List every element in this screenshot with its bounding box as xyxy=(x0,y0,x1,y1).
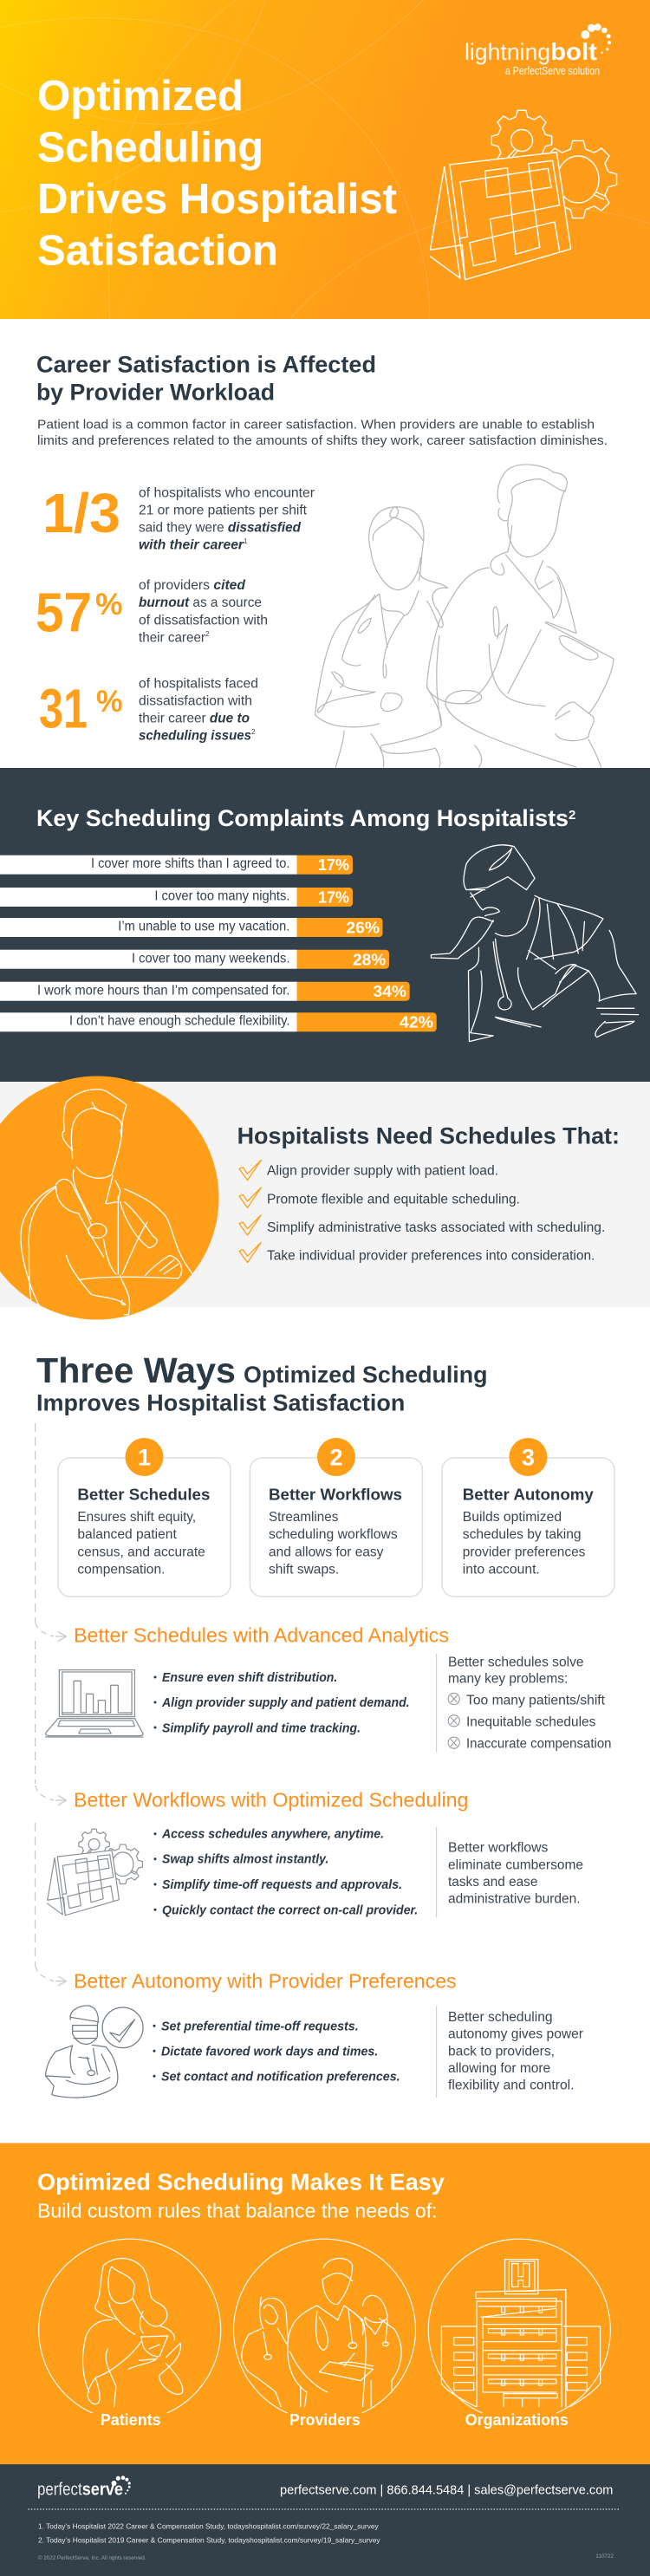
icon: patients circle xyxy=(39,2239,221,2413)
stat: 57 percent: % xyxy=(95,588,123,621)
checklist: Take individual provider preferences into consideration. xyxy=(267,1249,595,1264)
card: better schedules: Ensures shift equity, xyxy=(77,1510,196,1525)
heading: career satisfaction xyxy=(36,351,376,406)
logo: lightningbolt: bolt xyxy=(550,38,597,65)
stat: 57 percent: of providers cited xyxy=(139,578,245,593)
stat: 31 percent: 2 xyxy=(251,728,256,736)
panel: optimized scheduling makes it easy xyxy=(0,2143,650,2465)
stat: one third: 21 or more patients per shift xyxy=(139,503,308,517)
connector: dashed timeline with arrows xyxy=(36,1423,66,1986)
card: better autonomy xyxy=(442,1438,614,1597)
illustration: thinking doctor line art xyxy=(431,845,639,1042)
heading: makes it easy: Optimized Scheduling Makes It Easy xyxy=(37,2169,445,2195)
logo: lightningbolt: lightning xyxy=(465,39,550,65)
card: better workflows: shift swaps. xyxy=(269,1562,339,1577)
list: workflow benefits: Simplify time-off requests and approvals. xyxy=(162,1877,402,1892)
heading: optimized scheduling: Better Workflows with Optimized Scheduling xyxy=(74,1788,468,1811)
panel: key scheduling complaints xyxy=(0,768,650,1082)
list: autonomy benefits: Dictate favored work days and times. xyxy=(161,2044,378,2059)
text: references: 2. Today’s Hospitalist 2019 Career & Compensation Study, todayshospitalist.com/survey/19_salary_survey xyxy=(38,2535,380,2544)
text block: key problems: many key problems: xyxy=(448,1671,568,1686)
panel: career satisfaction xyxy=(36,351,614,767)
stat: 31 percent xyxy=(39,676,258,744)
bar chart: complaints xyxy=(0,855,437,1031)
bar: 28 percent weekends xyxy=(0,950,389,969)
text block: intro paragraph xyxy=(37,417,608,448)
heading: three ways xyxy=(36,1350,487,1416)
heading: three ways: Improves Hospitalist Satisfaction xyxy=(36,1390,405,1416)
card: better autonomy: 3 xyxy=(522,1445,535,1471)
panel: header xyxy=(0,0,650,319)
icon: masked doctor with check xyxy=(46,2006,143,2098)
card: better autonomy: Builds optimized xyxy=(463,1510,562,1525)
illustration: two doctors line art xyxy=(315,465,614,767)
bar: 28 percent weekends: 28% xyxy=(353,951,386,968)
icon: small calendar with gears xyxy=(48,1829,142,1916)
text block: intro paragraph: limits and preferences related to the amounts of shifts they work, career satisfaction diminishes. xyxy=(37,433,608,448)
heading: three ways: Three Ways xyxy=(36,1350,236,1390)
stat: 57 percent: of dissatisfaction with xyxy=(139,613,268,628)
stat: one third: 1 xyxy=(244,537,248,545)
icon: providers circle xyxy=(233,2239,416,2413)
card: better schedules: 1 xyxy=(138,1445,151,1471)
text block: key problems: Too many patients/shift xyxy=(466,1693,606,1708)
text block: autonomy summary: allowing for more xyxy=(448,2061,550,2076)
title: Optimized xyxy=(37,73,244,120)
stat: 31 percent: dissatisfaction with xyxy=(139,693,252,708)
icon: orange circle with doctor xyxy=(0,1077,218,1319)
checklist: Align provider supply with patient load. xyxy=(267,1164,498,1179)
text: references: 1. Today’s Hospitalist 2022 Career & Compensation Study, todayshospitalist.com/survey/22_salary_survey xyxy=(38,2521,379,2530)
text: copyright xyxy=(38,2553,614,2561)
title xyxy=(37,73,397,275)
panel: hospitalists need schedules xyxy=(0,1077,650,1319)
card: better schedules: Better Schedules xyxy=(77,1486,210,1504)
text block: key problems: Inequitable schedules xyxy=(466,1715,596,1730)
heading: provider preferences: Better Autonomy with Provider Preferences xyxy=(74,1969,457,1992)
list: analytics benefits: Ensure even shift distribution. xyxy=(162,1670,337,1685)
list: workflow benefits: Access schedules anywhere, anytime. xyxy=(161,1827,384,1842)
card: better workflows: Streamlines xyxy=(269,1510,338,1525)
text block: autonomy summary: autonomy gives power xyxy=(448,2027,583,2042)
list: analytics benefits: Align provider supply and patient demand. xyxy=(161,1695,410,1710)
bar: 26 percent vacation: I’m unable to use my vacation. xyxy=(118,920,289,934)
heading: complaints: 2 xyxy=(569,808,575,823)
icon: calendar with gears xyxy=(430,110,617,280)
title: Satisfaction xyxy=(37,228,278,275)
bar: 17 percent nights xyxy=(0,888,353,907)
text block: intro paragraph: Patient load is a common factor in career satisfaction. When providers are unable to establish xyxy=(37,417,595,432)
bar: 26 percent vacation: 26% xyxy=(346,920,380,937)
text block: autonomy summary xyxy=(448,2010,583,2092)
card: better workflows: scheduling workflows xyxy=(269,1527,398,1542)
section: better workflows with optimized scheduling xyxy=(48,1788,583,1917)
list: analytics benefits xyxy=(154,1670,410,1735)
stat: 31 percent: % xyxy=(96,685,123,719)
bar: 17 percent more shifts xyxy=(0,855,353,875)
heading: makes it easy xyxy=(37,2169,445,2221)
stat: 57 percent: 2 xyxy=(205,630,210,638)
bar: 17 percent nights: I cover too many nights. xyxy=(154,888,289,903)
heading: makes it easy: Build custom rules that balance the needs of: xyxy=(37,2199,438,2221)
text block: key problems: Inaccurate compensation xyxy=(466,1737,612,1752)
checklist: Promote flexible and equitable scheduling. xyxy=(267,1192,520,1207)
stat: one third: said they were dissatisfied xyxy=(139,521,301,536)
heading: career satisfaction: by Provider Workload xyxy=(36,380,275,406)
section: better schedules with advanced analytics xyxy=(46,1624,612,1753)
text: references xyxy=(38,2521,380,2544)
stat: 57 percent: their career xyxy=(139,630,205,645)
panel: three ways xyxy=(36,1350,614,2098)
text block: autonomy summary: flexibility and control. xyxy=(448,2078,574,2092)
bar: 17 percent more shifts: I cover more shifts than I agreed to. xyxy=(91,856,289,871)
stat: 31 percent: their career due to xyxy=(139,712,250,726)
list: autonomy benefits xyxy=(153,2019,400,2084)
stat: 57 percent: 57 xyxy=(36,582,92,644)
stat: 57 percent: burnout as a source xyxy=(139,595,262,610)
panel: footer xyxy=(0,2464,650,2576)
text block: workflows summary: eliminate cumbersome xyxy=(448,1857,583,1872)
bar: 17 percent nights: 17% xyxy=(318,888,349,906)
checklist xyxy=(239,1160,605,1264)
list: workflow benefits xyxy=(154,1827,418,1917)
text block: workflows summary xyxy=(448,1841,583,1906)
checklist: Simplify administrative tasks associated with scheduling. xyxy=(267,1220,605,1235)
title: Scheduling xyxy=(37,125,263,172)
list: analytics benefits: Simplify payroll and time tracking. xyxy=(162,1721,361,1735)
card: better schedules: census, and accurate xyxy=(77,1545,205,1559)
bar: 28 percent weekends: I cover too many weekends. xyxy=(132,951,289,966)
bar: 34 percent hours: I work more hours than I’m compensated for. xyxy=(37,983,289,998)
card: better schedules xyxy=(58,1438,231,1597)
bar: 42 percent flexibility: 42% xyxy=(400,1014,433,1031)
logo: perfectserve: perfect xyxy=(37,2481,82,2500)
text block: workflows summary: administrative burden. xyxy=(448,1891,581,1906)
bar: 42 percent flexibility xyxy=(0,1012,437,1031)
text block: autonomy summary: Better scheduling xyxy=(448,2010,553,2025)
bar: 34 percent hours: 34% xyxy=(373,983,406,1000)
card: better workflows: 2 xyxy=(329,1445,343,1471)
card: better autonomy: schedules by taking xyxy=(463,1527,582,1542)
stat: 57 percent xyxy=(36,578,268,645)
text block: key problems: Better schedules solve xyxy=(448,1655,584,1669)
heading: hospitalists need: Hospitalists Need Schedules That: xyxy=(237,1122,620,1148)
title: Drives Hospitalist xyxy=(37,176,397,223)
stat: one third: of hospitalists who encounter xyxy=(139,485,315,500)
list: autonomy benefits: Set contact and notification preferences. xyxy=(161,2069,400,2084)
icon: organizations circle with hospital xyxy=(428,2239,610,2413)
text: contact details: perfectserve.com | 866.844.5484 | sales@perfectserve.com xyxy=(280,2483,613,2497)
heading: three ways: Optimized Scheduling xyxy=(244,1362,487,1388)
text block: workflows summary: Better workflows xyxy=(448,1841,549,1856)
labels: audience names: Providers xyxy=(289,2410,361,2429)
card: better workflows: Better Workflows xyxy=(269,1486,402,1504)
text block: key problems xyxy=(448,1655,612,1752)
icon: laptop with bar chart xyxy=(46,1670,143,1737)
labels: audience names: Patients xyxy=(101,2410,161,2429)
stat: one third xyxy=(42,482,315,553)
list: workflow benefits: Swap shifts almost instantly. xyxy=(162,1852,328,1867)
card: better autonomy: Better Autonomy xyxy=(463,1486,594,1504)
section: better autonomy with provider preferences xyxy=(46,1969,583,2098)
text: copyright: © 2022 PerfectServe, Inc. All rights reserved. xyxy=(38,2555,146,2561)
bar: 34 percent hours xyxy=(0,982,410,1001)
bar: 17 percent more shifts: 17% xyxy=(318,856,349,874)
text block: workflows summary: tasks and ease xyxy=(448,1875,537,1890)
text block: autonomy summary: back to providers, xyxy=(448,2044,555,2059)
list: workflow benefits: Quickly contact the correct on-call provider. xyxy=(162,1903,418,1917)
stat: one third: 1/3 xyxy=(42,482,120,544)
stat: 31 percent: scheduling issues xyxy=(139,729,251,744)
card: better autonomy: into account. xyxy=(463,1562,540,1577)
card: better autonomy: provider preferences xyxy=(463,1545,586,1559)
heading: career satisfaction: Career Satisfaction is Affected xyxy=(36,351,376,377)
card: better workflows: and allows for easy xyxy=(269,1545,384,1559)
bar: 42 percent flexibility: I don’t have enough schedule flexibility. xyxy=(69,1014,289,1029)
bar: 26 percent vacation xyxy=(0,918,383,937)
labels: audience names xyxy=(101,2410,569,2429)
list: autonomy benefits: Set preferential time-off requests. xyxy=(161,2019,359,2033)
heading: complaints: Key Scheduling Complaints Among Hospitalists xyxy=(36,805,569,831)
card: better schedules: compensation. xyxy=(77,1562,165,1577)
logo: perfectserve: serve xyxy=(82,2481,123,2500)
heading: advanced analytics: Better Schedules with Advanced Analytics xyxy=(74,1624,449,1647)
labels: audience names: Organizations xyxy=(465,2410,569,2429)
stat: 31 percent: 31 xyxy=(39,677,88,739)
logo: lightningbolt: a PerfectServe solution xyxy=(505,65,600,77)
card: better workflows xyxy=(250,1438,422,1597)
logo: perfectserve xyxy=(37,2475,131,2500)
stat: 31 percent: of hospitalists faced xyxy=(139,676,258,691)
card: better schedules: balanced patient xyxy=(77,1527,177,1542)
logo: lightningbolt xyxy=(465,23,611,77)
text: copyright: 110722 xyxy=(595,2553,614,2560)
stat: one third: with their career xyxy=(139,538,244,553)
